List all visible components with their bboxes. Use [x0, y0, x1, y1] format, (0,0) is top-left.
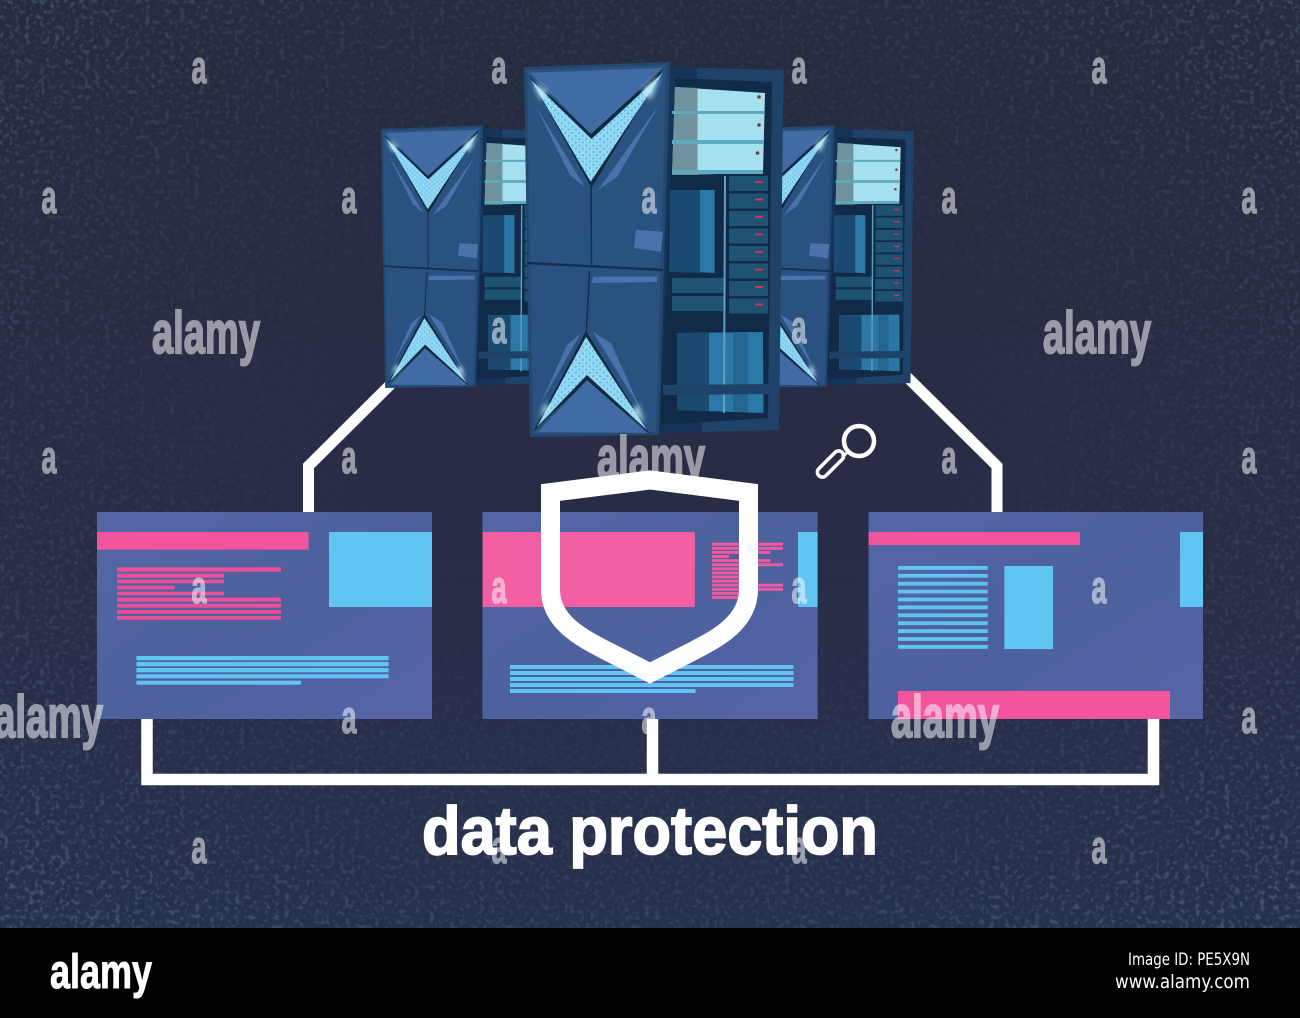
watermark text: a	[1242, 691, 1257, 743]
icon: magnifying glass	[815, 426, 874, 479]
watermark text: a	[492, 41, 507, 93]
image id: Image ID: PE5X9N	[1128, 950, 1250, 970]
pink text lines	[712, 543, 783, 599]
blue text lines	[898, 566, 988, 649]
watermark text: a	[492, 821, 507, 873]
watermark text: a	[642, 171, 657, 223]
watermark text: a	[492, 561, 507, 613]
watermark text: a	[792, 821, 807, 873]
connector: right server to panel	[903, 373, 997, 513]
watermark text: a	[192, 41, 207, 93]
watermark text: a	[42, 431, 57, 483]
watermark text: a	[942, 171, 957, 223]
watermark text: a	[792, 41, 807, 93]
watermark text: a	[1242, 171, 1257, 223]
watermark text: a	[1092, 561, 1107, 613]
watermark text: a	[1242, 431, 1257, 483]
website: www.alamy.com	[1115, 971, 1250, 993]
panel: right document	[869, 512, 1203, 719]
watermark text: a	[792, 561, 807, 613]
watermark text: a	[192, 821, 207, 873]
panel: center document	[482, 512, 818, 719]
watermark text: a	[492, 301, 507, 353]
icon: center server rack	[524, 62, 784, 437]
watermark text	[0, 41, 1257, 873]
title: data protection	[422, 793, 878, 869]
watermark text: alamy	[597, 425, 705, 491]
watermark text: a	[642, 691, 657, 743]
watermark text: alamy	[1043, 300, 1151, 366]
watermark text: a	[342, 431, 357, 483]
watermark text: a	[792, 301, 807, 353]
blue text lines	[136, 656, 389, 685]
connector: bottom bracket joining panels	[147, 718, 1154, 780]
footer bar	[0, 928, 1300, 1018]
panel: left document	[97, 512, 432, 719]
watermark text: a	[1092, 821, 1107, 873]
watermark text: a	[1092, 41, 1107, 93]
icon: right server rack	[732, 126, 914, 388]
pink text lines	[117, 567, 281, 620]
connector: left server to panel	[308, 383, 392, 513]
watermark text: a	[342, 691, 357, 743]
watermark text: a	[42, 171, 57, 223]
watermark text: a	[192, 561, 207, 613]
watermark text: alamy	[152, 300, 260, 366]
watermark text: a	[942, 431, 957, 483]
footer logo: alamy	[50, 946, 152, 999]
blue text lines	[510, 665, 794, 693]
icon: shield	[550, 480, 748, 673]
icon: left server rack	[381, 126, 563, 388]
watermark text: alamy	[891, 684, 999, 750]
watermark text: a	[342, 171, 357, 223]
